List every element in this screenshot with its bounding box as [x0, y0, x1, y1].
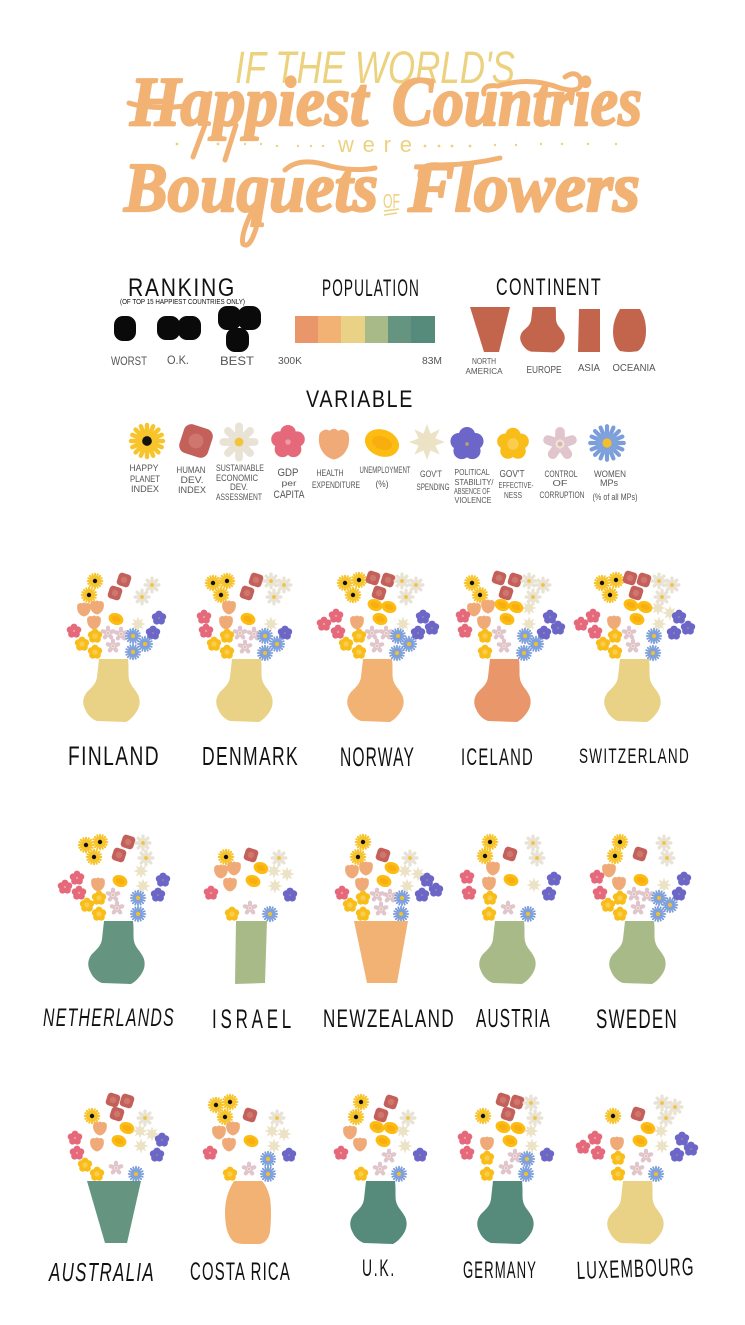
flowers: Finland — [67, 572, 166, 659]
bouquet: Australia — [48, 1092, 169, 1287]
variable: govt spending: SPENDING — [416, 482, 450, 492]
variable: unemployment: UNEMPLOYMENT — [360, 465, 411, 475]
title word: happiest: Happiest — [129, 64, 370, 141]
variable: control of corruption: OF — [552, 479, 568, 488]
heading: continent: CONTINENT — [496, 274, 602, 301]
ranking worst: WORST — [111, 354, 148, 368]
name: Costa Rica: COSTA RICA — [190, 1258, 291, 1286]
vase: Netherlands — [88, 921, 145, 984]
vase: Luxembourg — [607, 1181, 664, 1244]
variable: gdp per capita — [271, 425, 305, 501]
flowers: Costa Rica — [203, 1095, 296, 1181]
variable: unemployment: (%) — [376, 479, 388, 489]
heading: ranking: RANKING — [128, 274, 236, 302]
label: oceania: OCEANIA — [612, 363, 656, 374]
variable: gdp per capita: CAPITA — [274, 489, 305, 501]
variable: political stability: VIOLENCE — [454, 496, 492, 505]
variable: political stability: POLITICAL — [454, 468, 490, 477]
variable: happy planet index: PLANET — [130, 474, 160, 484]
variable: health expenditure: HEALTH — [316, 468, 344, 478]
name: Austria: AUSTRIA — [476, 1003, 551, 1033]
flowers: Netherlands — [58, 834, 170, 921]
label: north america — [466, 357, 503, 376]
vase: asia — [578, 309, 600, 352]
vase: Australia — [87, 1181, 141, 1243]
title word: of: OF — [383, 191, 400, 213]
legend: continent — [466, 274, 656, 376]
ranking ok: O.K. — [167, 353, 189, 367]
label: europe: EUROPE — [526, 365, 562, 376]
flowers: Luxembourg — [576, 1096, 698, 1181]
flowers: Norway — [317, 570, 439, 660]
variable: govt effectiveness: EFFECTIVE- — [498, 481, 534, 490]
variable: gdp per capita: GDP — [278, 467, 298, 479]
variable: govt effectiveness: NESS — [504, 491, 522, 500]
bouquet: U.K. — [334, 1094, 427, 1282]
title — [123, 42, 642, 245]
variable: sustainable economic dev assessment — [216, 426, 264, 502]
variable: sustainable economic dev assessment: SUSTAINABLE — [216, 463, 264, 473]
variable: happy planet index: HAPPY — [130, 463, 158, 473]
note: top 15 only: (OF TOP 15 HAPPIEST COUNTRIES ONLY) — [120, 299, 245, 306]
scale maximum: 83M — [422, 356, 442, 367]
name: Germany: GERMANY — [463, 1257, 537, 1284]
variable: happy planet index — [130, 425, 163, 494]
name: Denmark: DENMARK — [202, 741, 299, 771]
name: Sweden: SWEDEN — [596, 1004, 678, 1034]
flowers: New Zealand — [335, 835, 443, 921]
bouquet: Denmark — [197, 572, 299, 771]
variable: unemployment — [360, 424, 411, 489]
variable: sustainable economic dev assessment: ECONOMIC — [216, 473, 258, 483]
name: Norway: NORWAY — [340, 742, 415, 772]
heading: variable: VARIABLE — [306, 386, 414, 413]
population colour scale — [295, 316, 435, 343]
vase: europe — [520, 307, 565, 352]
bouquet: Finland — [67, 572, 166, 771]
variable: control of corruption: CONTROL — [544, 469, 578, 479]
vase: Denmark — [216, 659, 273, 722]
variable: human dev index: DEV. — [180, 475, 204, 485]
title word: countries: Countries — [392, 64, 642, 141]
vase: Iceland — [474, 659, 531, 722]
vase: Austria — [479, 921, 536, 984]
vase: Finland — [83, 659, 140, 722]
vase: Israel — [235, 921, 267, 984]
variable: sustainable economic dev assessment: ASSESSMENT — [216, 492, 262, 502]
bouquet: Norway — [317, 570, 439, 772]
variable: control of corruption: CORRUPTION — [540, 490, 584, 500]
variable: political stability: STABILITY/ — [454, 478, 494, 487]
name: U.K.: U.K. — [362, 1255, 396, 1282]
variable: gdp per capita: per — [282, 479, 297, 488]
vase: New Zealand — [354, 921, 408, 983]
vase: oceania — [613, 309, 646, 352]
bouquet: Germany — [458, 1092, 554, 1284]
scale minimum: 300K — [278, 356, 302, 367]
ranking best — [218, 306, 261, 368]
title word: flowers: Flowers — [407, 150, 640, 227]
title line: if the world's: IF THE WORLD'S — [235, 42, 515, 93]
variable: sustainable economic dev assessment: DEV. — [230, 482, 248, 492]
name: Australia: AUSTRALIA — [48, 1257, 155, 1287]
bouquet: Austria — [460, 835, 561, 1033]
variable: govt effectiveness: GOV'T — [500, 469, 524, 480]
flowers: Switzerland — [574, 570, 695, 660]
variable: human dev index — [176, 422, 215, 495]
bouquet: Costa Rica — [190, 1095, 296, 1286]
vase: Germany — [477, 1181, 534, 1244]
variable: health expenditure — [312, 429, 360, 490]
vase: north america — [470, 307, 510, 352]
name: Finland: FINLAND — [68, 741, 160, 771]
vase: Costa Rica — [225, 1181, 271, 1244]
flowers: Australia — [68, 1092, 169, 1181]
name: Israel: ISRAEL — [212, 1004, 295, 1034]
legend: ranking — [111, 274, 261, 368]
flowers: Germany — [458, 1092, 554, 1181]
variable: control of corruption — [540, 432, 584, 500]
variable: women mps — [590, 426, 638, 502]
bouquet: Netherlands — [43, 834, 175, 1032]
flowers: U.K. — [334, 1094, 427, 1181]
bouquet: Luxembourg — [576, 1096, 698, 1285]
flowers: Denmark — [197, 572, 292, 660]
variable: happy planet index: INDEX — [131, 484, 159, 494]
flowers: Sweden — [590, 835, 691, 921]
flowers: Israel — [204, 847, 297, 921]
vase: Sweden — [609, 921, 666, 984]
heading: population: POPULATION — [322, 275, 420, 302]
variable: human dev index: INDEX — [178, 485, 206, 495]
variable: women mps: MPs — [600, 478, 618, 488]
title word: were: were — [337, 132, 412, 157]
name: Netherlands: NETHERLANDS — [43, 1004, 175, 1032]
name: Iceland: ICELAND — [461, 744, 534, 771]
name: New Zealand: NEWZEALAND — [323, 1005, 455, 1033]
vase: U.K. — [350, 1181, 407, 1244]
flowers: Austria — [460, 835, 561, 921]
ranking worst — [111, 316, 148, 368]
label: asia: ASIA — [578, 363, 600, 374]
variable: govt spending: GOV'T — [420, 469, 442, 479]
ranking best: BEST — [220, 354, 255, 368]
bouquet: Switzerland — [574, 570, 695, 768]
variable: health expenditure: EXPENDITURE — [312, 480, 360, 490]
bouquet: Israel — [204, 847, 297, 1034]
variable: women mps: (% of all MPs) — [592, 492, 638, 502]
variable: govt effectiveness — [497, 428, 534, 500]
label: north america: AMERICA — [466, 367, 503, 376]
legend: population — [278, 275, 442, 367]
variable: human dev index: HUMAN — [176, 465, 206, 475]
bouquet: Sweden — [590, 835, 691, 1034]
variable: political stability: ABSENCE OF — [454, 487, 490, 496]
ranking ok — [157, 316, 201, 367]
variable: political stability — [450, 427, 494, 505]
bouquet: New Zealand — [323, 835, 455, 1033]
flowers: Iceland — [456, 570, 565, 660]
bouquet: Iceland — [456, 570, 565, 771]
title word: bouquets: Bouquets — [123, 150, 378, 227]
variable: govt spending — [409, 424, 450, 492]
variable: women mps: WOMEN — [594, 469, 626, 479]
legend: variable — [130, 386, 638, 505]
label: north america: NORTH — [472, 357, 496, 366]
vase: Switzerland — [604, 659, 661, 722]
vase: Norway — [347, 659, 404, 722]
